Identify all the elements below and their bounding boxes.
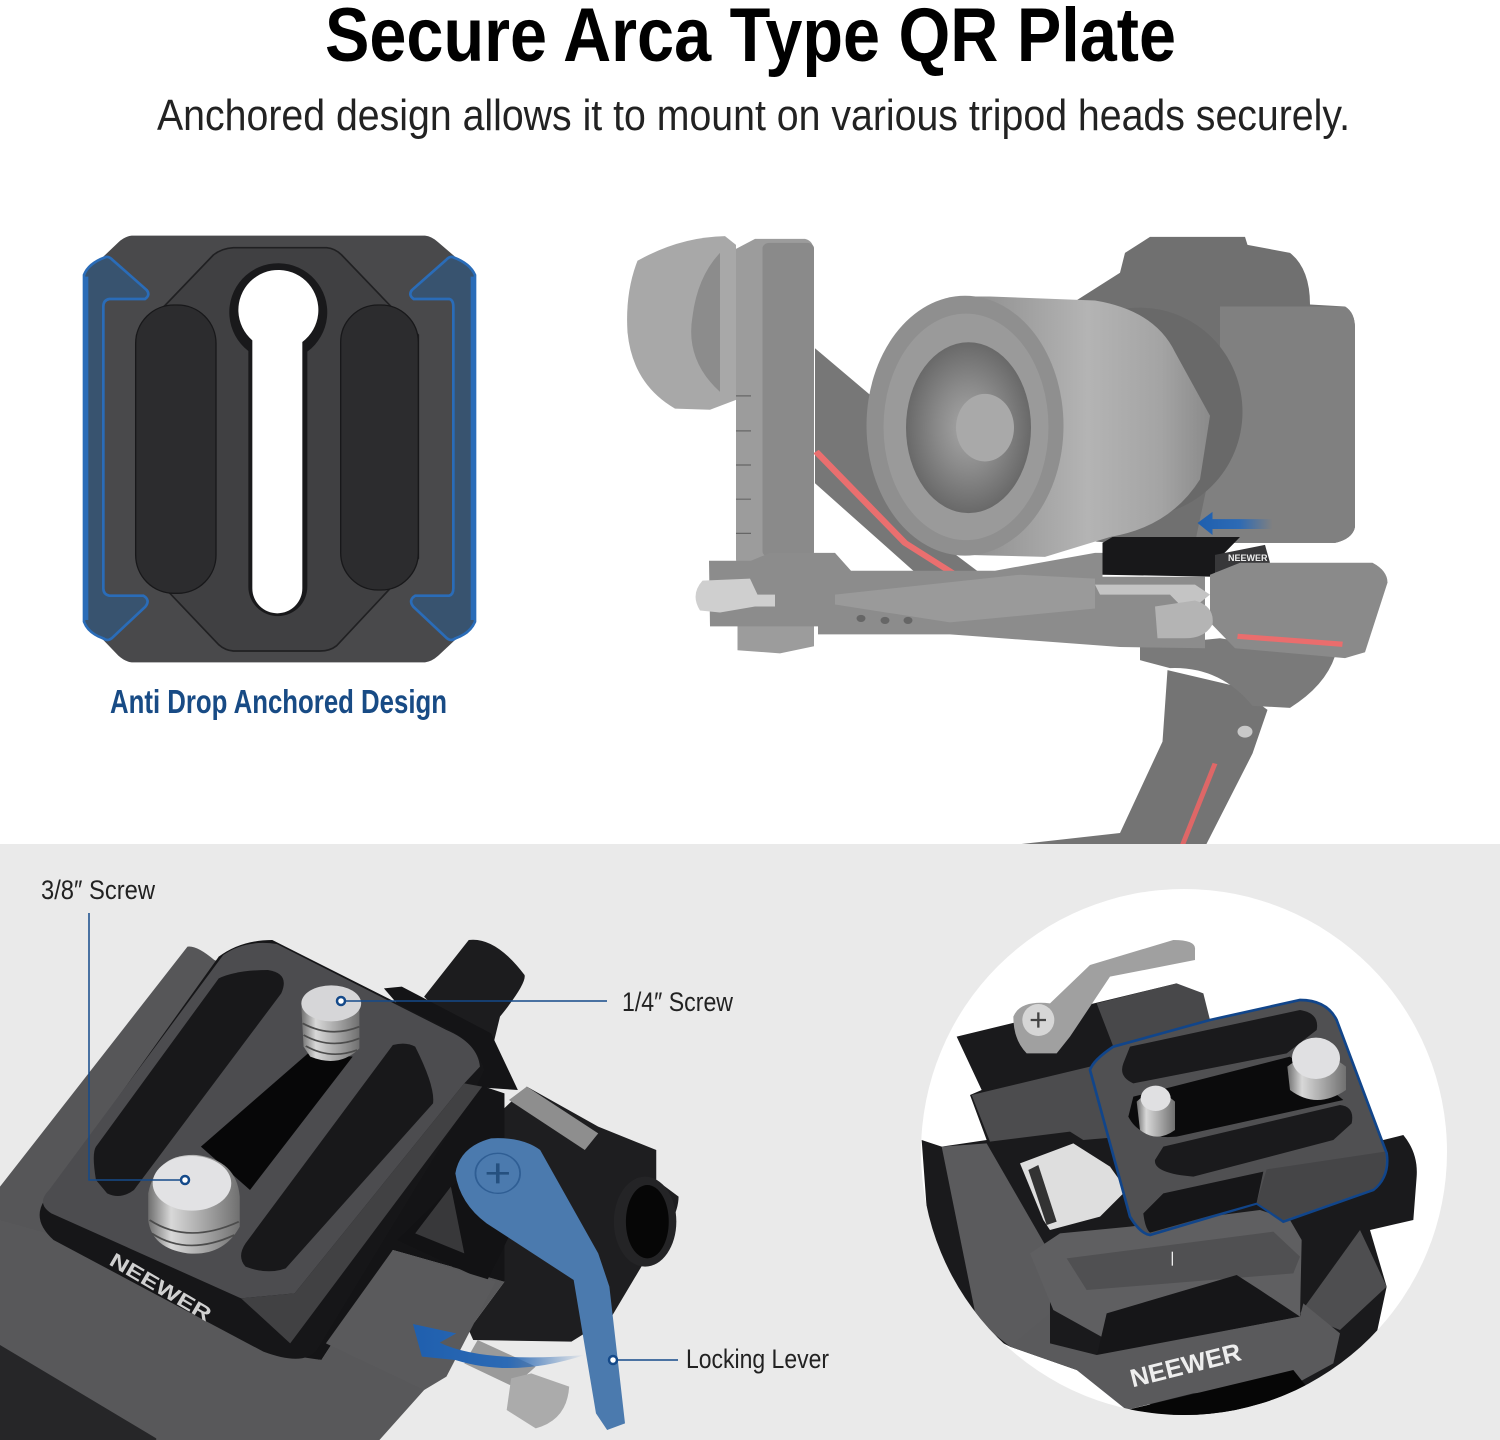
plate top face (43, 943, 480, 1298)
vertical rail (736, 239, 814, 653)
icon: blue anchor right (410, 257, 475, 640)
quick release plate (1102, 537, 1240, 577)
right close-up in circle (922, 940, 1417, 1417)
right screw (1287, 1062, 1346, 1100)
locking lever (455, 1138, 625, 1430)
back block top (1097, 983, 1210, 1047)
pockets (136, 305, 216, 593)
caption: Anti Drop Anchored Design (110, 683, 447, 720)
callout: 1/4 screw: 1/4″ Screw (622, 987, 733, 1017)
lower band (1010, 1303, 1340, 1410)
QR plate base (40, 940, 484, 1359)
lens front (866, 296, 1064, 556)
dark silhouette (922, 983, 1417, 1417)
carbon arm (815, 348, 985, 577)
front notch (1101, 1275, 1300, 1344)
right clamp block (446, 1087, 679, 1342)
arrow (413, 1324, 585, 1368)
centre slot (201, 1053, 353, 1190)
panel: bottom grey background (0, 844, 1500, 1440)
recessed centre (137, 248, 418, 651)
hub (1140, 638, 1335, 708)
knob shaft (464, 1340, 536, 1387)
left close-up of QR clamp (0, 940, 679, 1440)
side motor (627, 236, 736, 410)
camera on gimbal illustration (627, 236, 1388, 847)
callout: locking lever: Locking Lever (686, 1344, 829, 1374)
callout: locking lever (609, 1344, 829, 1374)
left side panel (942, 1143, 1050, 1347)
grey block beneath lever (326, 1250, 496, 1390)
right column (1300, 1230, 1387, 1330)
3/8 screw (148, 1155, 240, 1254)
keyhole slot (229, 263, 327, 616)
subtitle: Anchored design allows it to mount on various tripod heads securely. (157, 91, 1350, 140)
camera body (1070, 237, 1355, 543)
mid plate (972, 1067, 1123, 1142)
rubber pads (94, 970, 284, 1196)
cross bar (709, 553, 1205, 648)
locking box (397, 1183, 509, 1282)
knob (696, 579, 775, 612)
lens barrel (965, 297, 1210, 557)
pads (1122, 1010, 1317, 1083)
left screw (1136, 1098, 1175, 1137)
lower rail (0, 1220, 504, 1440)
icon: blue anchor left (84, 257, 148, 640)
silver lever (1013, 940, 1195, 1053)
front base (1030, 1210, 1302, 1343)
plate brand mark: NEEWER (1228, 553, 1268, 563)
callout: 1/4 screw (337, 987, 733, 1017)
upper left body (0, 946, 223, 1240)
groove beside plate (277, 1080, 504, 1360)
grip (1210, 563, 1388, 658)
callout: 3/8 screw: 3/8″ Screw (41, 875, 155, 905)
slot (1128, 1057, 1343, 1137)
QR plate illustration (84, 236, 475, 662)
1/4 screw (301, 1007, 359, 1061)
gimbal handle (995, 670, 1268, 847)
silver bracket and knurled knob (1095, 585, 1210, 612)
silver clip (1020, 1143, 1127, 1230)
brand mark: NEEWER (1127, 1339, 1244, 1393)
bottom black (1127, 1370, 1307, 1417)
brand mark: NEEWER (105, 1249, 216, 1326)
callout: 3/8 screw (41, 875, 189, 1184)
arrow (1198, 512, 1272, 535)
white circle (921, 889, 1447, 1415)
QR plate outlined (1090, 1000, 1387, 1235)
top cylinder post (424, 940, 525, 1053)
lens mount (1038, 308, 1242, 516)
